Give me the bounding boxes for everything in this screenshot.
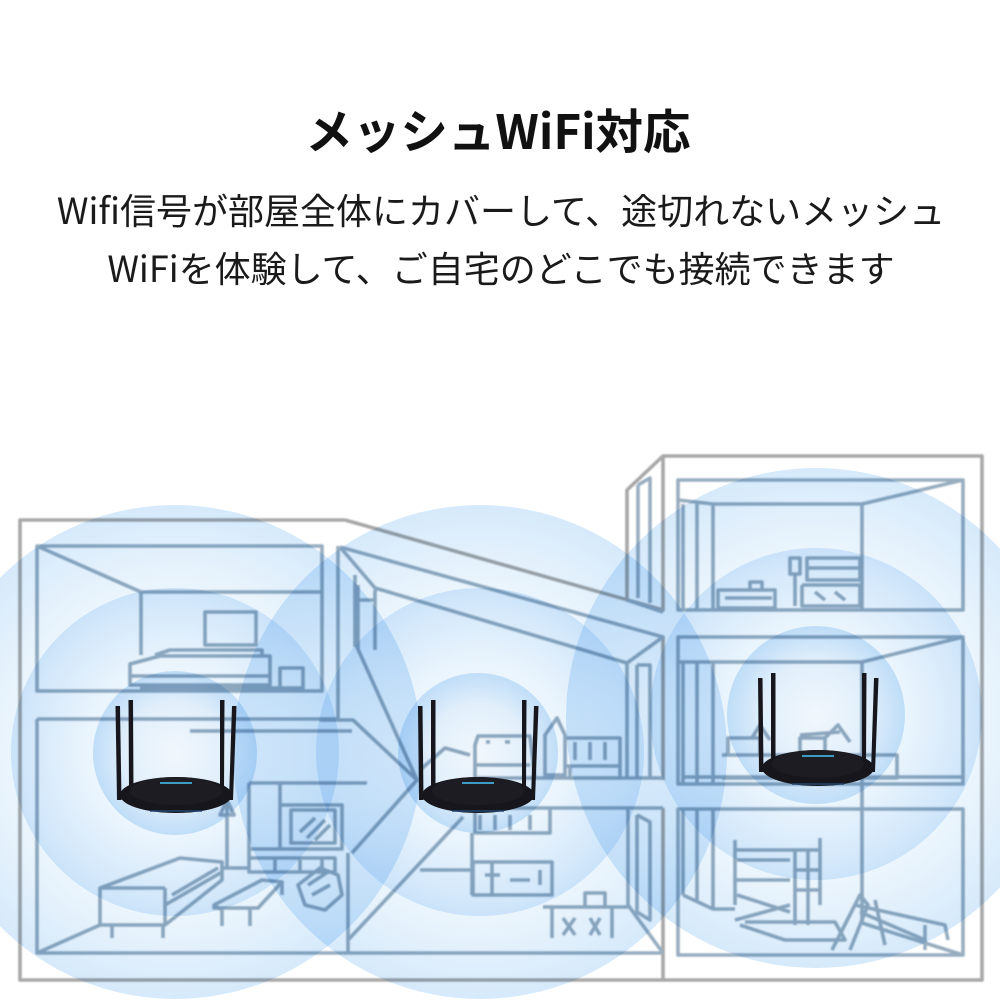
description text bbox=[57, 183, 945, 293]
wifi signal circles: centre bbox=[233, 505, 727, 999]
upper left room furniture bbox=[130, 612, 303, 688]
wall unit and television bbox=[249, 783, 367, 872]
lower left room bbox=[37, 719, 663, 953]
lower centre room bbox=[420, 808, 663, 953]
upper left room bbox=[37, 546, 322, 691]
centre room bbox=[338, 546, 663, 778]
upper right strip windows bbox=[627, 478, 663, 612]
router: centre bbox=[418, 700, 538, 813]
router: left bbox=[116, 700, 236, 813]
centre room angled walls bbox=[320, 647, 463, 953]
middle right room furniture bbox=[722, 725, 897, 778]
top right room furniture bbox=[718, 558, 860, 608]
bottom right room bed and chair bbox=[735, 838, 948, 950]
outer walls bbox=[20, 456, 982, 980]
description text: WiFiを体験して、ご自宅のどこでも接続できます bbox=[107, 241, 895, 293]
kitchen shelves and counter bbox=[420, 718, 620, 778]
description text: Wifi信号が部屋全体にカバーして、途切れないメッシュ bbox=[57, 183, 945, 235]
wifi signal circles: right bbox=[566, 468, 1000, 968]
house line drawing bbox=[20, 456, 982, 980]
wifi signal circles: left bbox=[0, 505, 422, 999]
router: right bbox=[758, 673, 878, 786]
sofa, lamp and table bbox=[100, 798, 282, 938]
armchair bbox=[298, 868, 342, 910]
title: メッシュWiFi対応 bbox=[305, 94, 691, 163]
right building rooms bbox=[678, 480, 963, 610]
